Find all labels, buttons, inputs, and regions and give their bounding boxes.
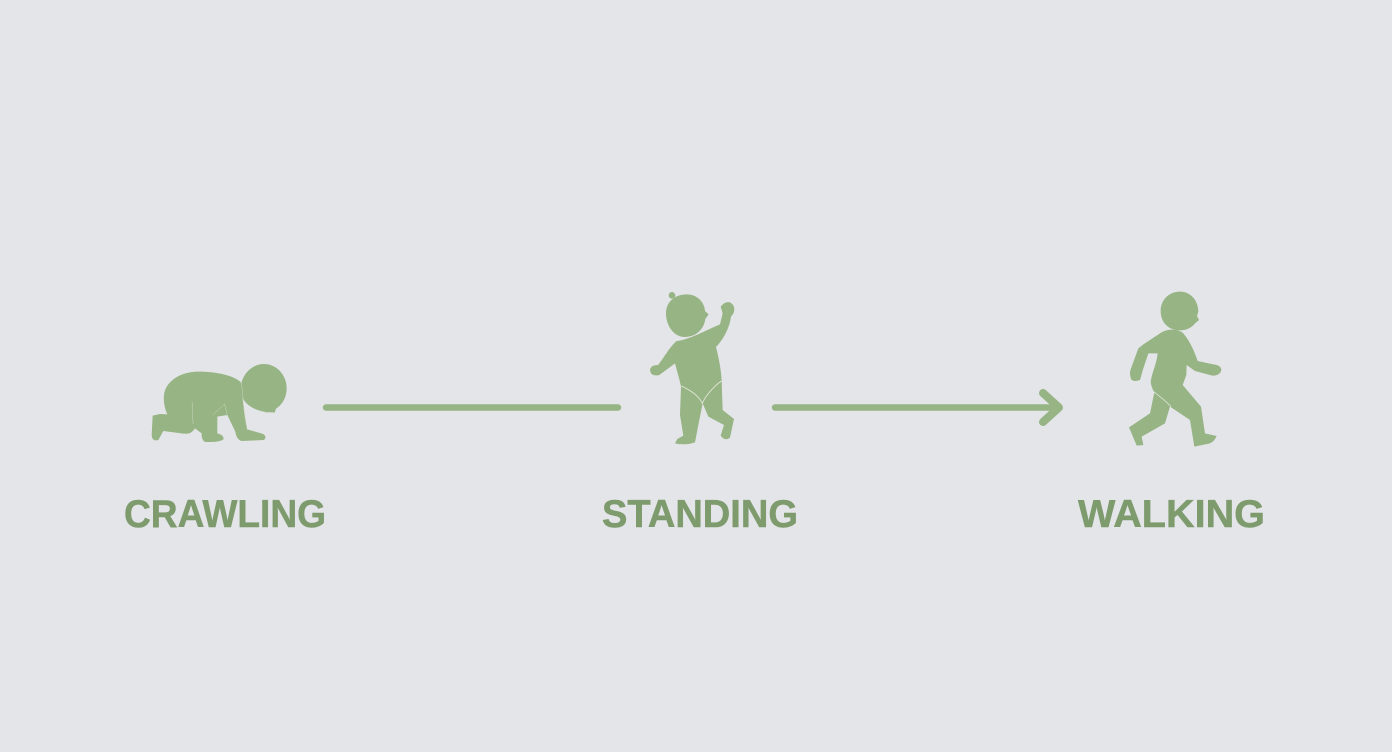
label: crawling: CRAWLING [124, 493, 326, 536]
label: standing: STANDING [602, 493, 798, 536]
label: walking: WALKING [1078, 493, 1265, 536]
icon: crawling baby [152, 364, 287, 442]
icon: walking baby [1129, 292, 1221, 447]
line: standing to walking with arrow [775, 393, 1059, 422]
line: crawling to standing [326, 404, 618, 411]
icon: standing baby [650, 292, 734, 444]
